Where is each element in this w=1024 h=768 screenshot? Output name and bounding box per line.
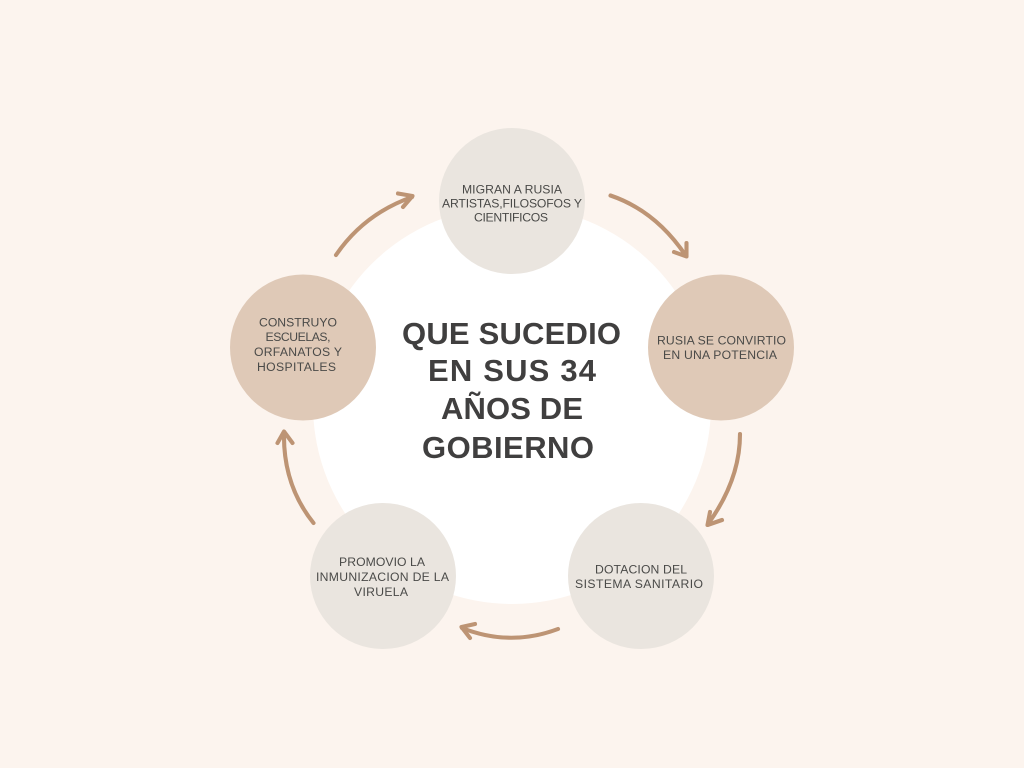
central white circle xyxy=(313,206,711,604)
node: sistema sanitario: SISTEMA SANITARIO xyxy=(575,577,703,591)
node: migran a Rusia: ARTISTAS,FILOSOFOS Y xyxy=(442,196,582,210)
node: escuelas: CONSTRUYO xyxy=(259,316,337,330)
node: Rusia potencia xyxy=(648,274,794,420)
node: sistema sanitario: DOTACION DEL xyxy=(595,562,687,576)
node: migran a Rusia: CIENTIFICOS xyxy=(474,210,548,224)
node: Rusia potencia: RUSIA SE CONVIRTIO xyxy=(657,334,786,348)
node: escuelas xyxy=(230,274,376,420)
title: EN SUS 34 xyxy=(428,353,597,388)
node: migran a Rusia xyxy=(439,128,585,274)
node: escuelas: ESCUELAS, xyxy=(266,330,330,344)
title xyxy=(402,316,621,465)
arrow: bottom right to bottom left xyxy=(462,624,558,638)
node: inmunizacion xyxy=(310,503,456,649)
arrow: bottom left to left xyxy=(278,432,314,523)
node: inmunizacion: VIRUELA xyxy=(354,585,409,599)
node: migran a Rusia: MIGRAN A RUSIA xyxy=(462,182,563,196)
node: escuelas: ORFANATOS Y xyxy=(254,345,342,359)
title: GOBIERNO xyxy=(422,430,594,465)
node: sistema sanitario xyxy=(568,503,714,649)
node: inmunizacion: PROMOVIO LA xyxy=(339,555,426,569)
arrow: right to bottom right xyxy=(708,434,740,525)
node: Rusia potencia: EN UNA POTENCIA xyxy=(663,348,778,362)
arrow: top to right xyxy=(610,196,686,256)
title: AÑOS DE xyxy=(441,391,583,426)
node: escuelas: HOSPITALES xyxy=(257,360,336,374)
title: QUE SUCEDIO xyxy=(402,316,621,351)
node: inmunizacion: INMUNIZACION DE LA xyxy=(316,570,450,584)
arrow: left to top xyxy=(336,194,412,255)
